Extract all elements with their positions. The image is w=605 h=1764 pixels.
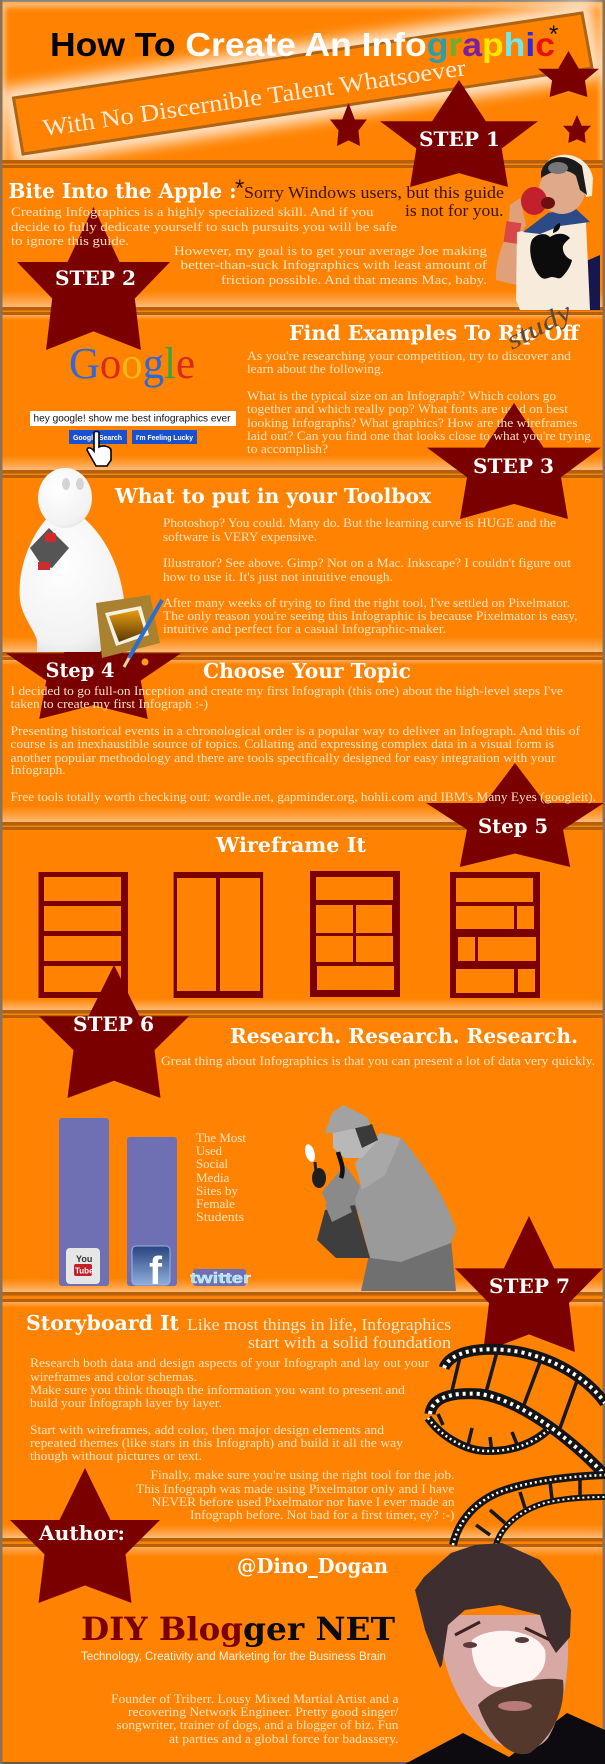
apple body text left: [11, 204, 397, 248]
chart caption: Social: [196, 1156, 228, 1171]
storyboard closing text: Finally, make sure you're using the right tool for the job.: [150, 1467, 454, 1482]
storyboard body text: Make sure you think though the information you want to present and: [30, 1382, 406, 1397]
icon: pixelmator: [96, 595, 162, 667]
panel: title background: [0, 0, 605, 174]
examples body text continued: laid out? Can you find one that looks close to what you're trying: [247, 428, 592, 443]
topic body text: course is an inexhaustible source of topics. Collating and expressing complex data in a visual form is: [10, 736, 554, 751]
storyboard closing text: NEVER before used Pixelmator nor have I ever made an: [152, 1494, 455, 1509]
wireframe 1: [38, 872, 128, 998]
windows note: [244, 183, 504, 220]
chart caption: Students: [196, 1209, 244, 1224]
apple body text right: better-than-suck Infographics with least amount of: [180, 257, 488, 272]
button: feeling lucky: I'm Feeling Lucky: [136, 433, 194, 442]
storyboard closing text: [136, 1467, 455, 1522]
film: lower strip: [453, 1475, 605, 1545]
logo tagline: Technology, Creativity and Marketing for the Business Brain: [81, 1651, 386, 1663]
logo: diy blogger net: [81, 1610, 395, 1648]
heading: storyboard it: Storyboard It: [26, 1311, 180, 1335]
search box: hey google! show me best infographics ever: [34, 412, 231, 424]
topic body text: [10, 683, 596, 804]
heading: find examples: Find Examples To Rip Off: [289, 321, 580, 345]
star: step 5: Step 5: [478, 814, 548, 838]
chart caption: Female: [196, 1196, 235, 1211]
examples body text continued: [247, 415, 592, 456]
star: step 5: [426, 763, 604, 867]
panel: wireframe background: [0, 830, 605, 1010]
panel: storyboard background: [0, 1302, 605, 1538]
film: upper roll: [428, 1349, 605, 1475]
star: step 3: STEP 3: [473, 454, 554, 478]
panel: toolbox background: [0, 478, 605, 652]
chart caption: The Most: [196, 1130, 246, 1145]
panel: apple background: [0, 168, 605, 307]
storyboard subtitle: start with a solid foundation: [248, 1333, 451, 1352]
examples body text: As you're researching your competition, try to discover and: [247, 348, 572, 363]
chart caption: [196, 1130, 246, 1224]
apple body text left: decide to fully dedicate yourself to such pursuits you will be safe: [11, 219, 397, 234]
windows note: is not for you.: [405, 201, 504, 220]
topic body text: taken to create my first Infograph :-): [10, 696, 208, 711]
logo: diy blogger net: DIY Blog: [81, 1610, 243, 1648]
author handle: @Dino_Dogan: [237, 1554, 388, 1578]
research intro text: Great thing about Infographics is that you can present a lot of data very quickly.: [161, 1053, 595, 1068]
bar: facebook: [127, 1137, 177, 1293]
author bio: Founder of Triberr. Lousy Mixed Martial Artist and a: [111, 1691, 399, 1706]
step 4 label: Step 4: [46, 658, 115, 682]
decorative star: [330, 103, 367, 146]
examples body text: learn about the following.: [247, 361, 384, 376]
heading: wireframe it: Wireframe It: [215, 833, 367, 857]
apple body text left: to ignore this guide.: [11, 233, 129, 248]
panel: research background: [0, 1018, 605, 1292]
topic body text: another popular methodology and there are tools specifically designed for easy integration with your: [10, 750, 556, 765]
star: step 6: STEP 6: [73, 1012, 154, 1036]
star: step 4: [6, 612, 181, 719]
storyboard body text: repeated themes (like stars in this Infograph) and build it all the way: [30, 1435, 404, 1450]
author bio: songwriter, trainer of dogs, and a blogger of biz. Fun: [116, 1717, 399, 1732]
toolbox body text: intuitive and perfect for a casual Infographic-maker.: [163, 621, 446, 636]
star: step 2: [17, 207, 170, 350]
examples body text continued: to accomplish?: [247, 441, 328, 456]
wireframe 4: [450, 872, 540, 998]
star: step 6: [39, 965, 189, 1098]
chart caption: Sites by: [196, 1183, 238, 1198]
windows note: Sorry Windows users, but this guide: [244, 183, 504, 202]
heading: choose your topic: Choose Your Topic: [203, 659, 411, 683]
button: google search: Google Search: [73, 433, 122, 442]
panel: author background: [0, 1547, 605, 1764]
bar: youtube: You: [76, 1254, 92, 1264]
topic body text: Presenting historical events in a chronological order is a popular way to deliver an Infograph. And this of: [10, 723, 581, 738]
author bio: [111, 1691, 399, 1746]
storyboard body text: build your Infograph layer by layer.: [30, 1395, 222, 1410]
storyboard body text: though without pictures or text.: [30, 1448, 202, 1463]
button: feeling lucky: [132, 430, 197, 444]
image: kid biting an apple: [496, 155, 600, 310]
toolbox body text: Illustrator? See above. Gimp? Not on a Mac. Inkscape? I couldn't figure out: [163, 555, 571, 570]
topic body text: Infograph.: [10, 762, 66, 777]
examples body text: [247, 348, 572, 416]
apple body text right: friction possible. And that means Mac, baby.: [221, 272, 487, 287]
image: white 3d figure with stapler: [20, 468, 125, 652]
star: author: Author:: [38, 1521, 125, 1545]
tilted subtitle banner: With No Discernible Talent Whatsoever: [41, 55, 467, 142]
chart caption: Media: [196, 1170, 230, 1185]
storyboard body text: [30, 1355, 430, 1463]
topic body text: Free tools totally worth checking out: wordle.net, gapminder.org, hohli.com and IBM's Many Eyes (googleit).: [10, 789, 596, 804]
chart caption: Used: [196, 1143, 222, 1158]
examples body text continued: looking Infographs? What graphics? How are the wireframes: [247, 415, 578, 430]
icon: hand cursor: [87, 432, 111, 466]
bar: twitter: [190, 1269, 251, 1287]
bar: twitter: twitter: [190, 1270, 251, 1287]
star: author: [10, 1468, 160, 1603]
toolbox body text: how to use it. It's just not intuitive enough.: [163, 569, 393, 584]
panel: topic background: [0, 660, 605, 822]
toolbox body text: software is VERY expensive.: [163, 529, 317, 544]
star: step 7: STEP 7: [489, 1274, 570, 1298]
examples body text: What is the typical size on an Infograph? Which colors go: [247, 388, 556, 403]
star: step 1: [380, 80, 538, 187]
author bio: recovering Network Engineer. Pretty good singer/: [128, 1704, 399, 1719]
wireframe 2: [174, 872, 263, 998]
title asterisk: *: [549, 21, 558, 48]
storyboard body text: Research both data and design aspects of your Infograph and lay out your: [30, 1355, 430, 1370]
tilted subtitle banner: [14, 13, 592, 154]
toolbox body text: [163, 515, 578, 636]
star: step 2: STEP 2: [55, 266, 136, 290]
decorative star: [563, 115, 591, 143]
storyboard subtitle: Like most things in life, Infographics: [187, 1315, 451, 1334]
decorative star: [538, 51, 599, 97]
heading: research: Research. Research. Research.: [230, 1024, 578, 1048]
star: step 7: [455, 1216, 603, 1352]
apple body text right: However, my goal is to get your average Joe making: [174, 243, 488, 258]
panel: examples background: [0, 315, 605, 470]
toolbox body text: The only reason you're seeing this Infographic is because Pixelmator is easy,: [163, 608, 578, 623]
bar: youtube: [59, 1118, 109, 1286]
apple body text right: [174, 243, 488, 287]
apple body text left: Creating Infographics is a highly specialized skill. And if you: [11, 204, 374, 219]
heading: toolbox: What to put in your Toolbox: [114, 484, 432, 508]
topic body text: I decided to go full-on Inception and create my first Infograph (this one) about the high-level steps I've: [10, 683, 563, 698]
toolbox body text: Photoshop? You could. Many do. But the learning curve is HUGE and the: [163, 515, 556, 530]
toolbox body text: After many weeks of trying to find the right tool, I've settled on Pixelmator.: [163, 595, 570, 610]
wireframe 3: [310, 871, 400, 997]
image: sherlock with magnifying glass: [303, 1105, 456, 1291]
author bio: at parties and a global force for badassery.: [169, 1731, 398, 1746]
star: step 1: STEP 1: [419, 127, 500, 151]
image: film strip: [428, 1349, 605, 1545]
storyboard body text: wireframes and color schemas.: [30, 1369, 197, 1384]
bar: youtube: Tube: [75, 1266, 94, 1276]
photo: author portrait: [405, 1543, 605, 1764]
storyboard closing text: Infograph before. Not bad for a first timer, ey? :-): [190, 1507, 454, 1522]
button: google search: [69, 430, 127, 444]
asterisk: *: [235, 175, 244, 202]
logo: google: Google: [69, 339, 195, 388]
examples body text: together and which really pop? What fonts are used on best: [247, 401, 568, 416]
storyboard closing text: This Infograph was made using Pixelmator only and I have: [136, 1481, 455, 1496]
bar: facebook: f: [149, 1250, 163, 1293]
storyboard body text: Start with wireframes, add color, then major design elements and: [30, 1422, 385, 1437]
star: step 3: [427, 403, 601, 519]
storyboard subtitle: [187, 1315, 451, 1352]
handwritten word: study: study: [501, 297, 577, 355]
logo: diy blogger net: ger NET: [243, 1610, 395, 1648]
title: How To Create An Info graphic: [50, 26, 555, 63]
heading: bite into the apple: Bite Into the Apple :: [8, 179, 236, 203]
bar chart: social media sites: [59, 1118, 251, 1293]
